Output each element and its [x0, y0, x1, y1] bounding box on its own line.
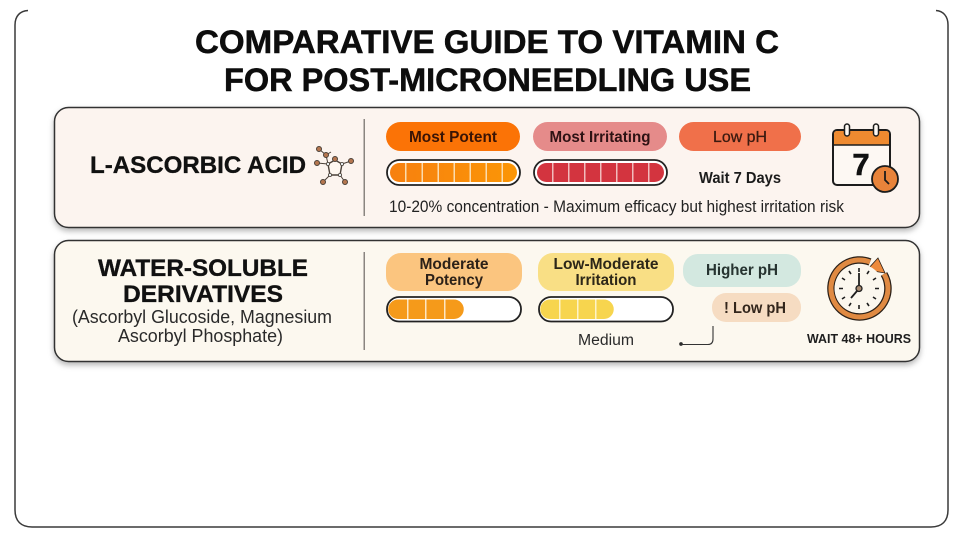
pill: low pH: Low pH	[713, 129, 767, 146]
panel: water-soluble derivatives	[54, 240, 920, 362]
heading: L-ascorbic acid: L-ASCORBIC ACID	[90, 152, 306, 179]
pill: moderate potency	[386, 253, 522, 291]
icon: molecule	[314, 146, 354, 184]
pill: most potent: Most Potent	[409, 129, 498, 146]
pill: higher pH	[683, 254, 801, 287]
title: COMPARATIVE GUIDE TO VITAMIN C	[195, 24, 779, 60]
label: wait 7 days: Wait 7 Days	[699, 170, 781, 187]
pill: low-moderate irritation: Low-Moderate	[554, 256, 659, 273]
gauge: potency full	[387, 160, 520, 185]
label: wait 48+ hours: WAIT 48+ HOURS	[807, 331, 911, 346]
title	[195, 24, 779, 98]
pill: most potent	[386, 122, 520, 151]
pill: low-moderate irritation	[538, 253, 674, 291]
heading: water-soluble derivatives: DERIVATIVES	[123, 281, 283, 308]
pill: most irritating: Most Irritating	[550, 129, 650, 146]
icon: calendar: 7	[852, 147, 870, 182]
pill: low pH	[679, 122, 801, 151]
label: medium: Medium	[578, 332, 634, 349]
icon: clock with arrow	[831, 258, 888, 317]
panel: L-ascorbic acid	[54, 108, 920, 228]
pill: moderate potency: Moderate	[420, 256, 489, 273]
pill: moderate potency: Potency	[425, 272, 483, 289]
gauge: potency moderate	[387, 297, 521, 322]
pill: low pH warning	[712, 293, 801, 322]
gauge: irritation full	[534, 160, 667, 185]
gauge: irritation low-moderate	[539, 297, 673, 322]
icon: calendar	[833, 124, 898, 192]
pill: most irritating	[533, 122, 667, 151]
title: FOR POST-MICRONEEDLING USE	[224, 62, 751, 98]
pill: higher pH: Higher pH	[706, 262, 778, 279]
heading: water-soluble derivatives: WATER-SOLUBLE	[98, 255, 308, 282]
pill: low-moderate irritation: Irritation	[576, 272, 636, 289]
subheading: derivative names	[72, 307, 332, 346]
subheading: derivative names: Ascorbyl Phosphate)	[118, 326, 283, 346]
pill: low pH warning: ! Low pH	[724, 300, 786, 317]
heading: water-soluble derivatives	[98, 255, 308, 308]
arrow: connector	[680, 326, 713, 345]
description: 10-20% concentration - Maximum efficacy but highest irritation risk	[389, 198, 845, 216]
subheading: derivative names: (Ascorbyl Glucoside, Magnesium	[72, 307, 332, 327]
